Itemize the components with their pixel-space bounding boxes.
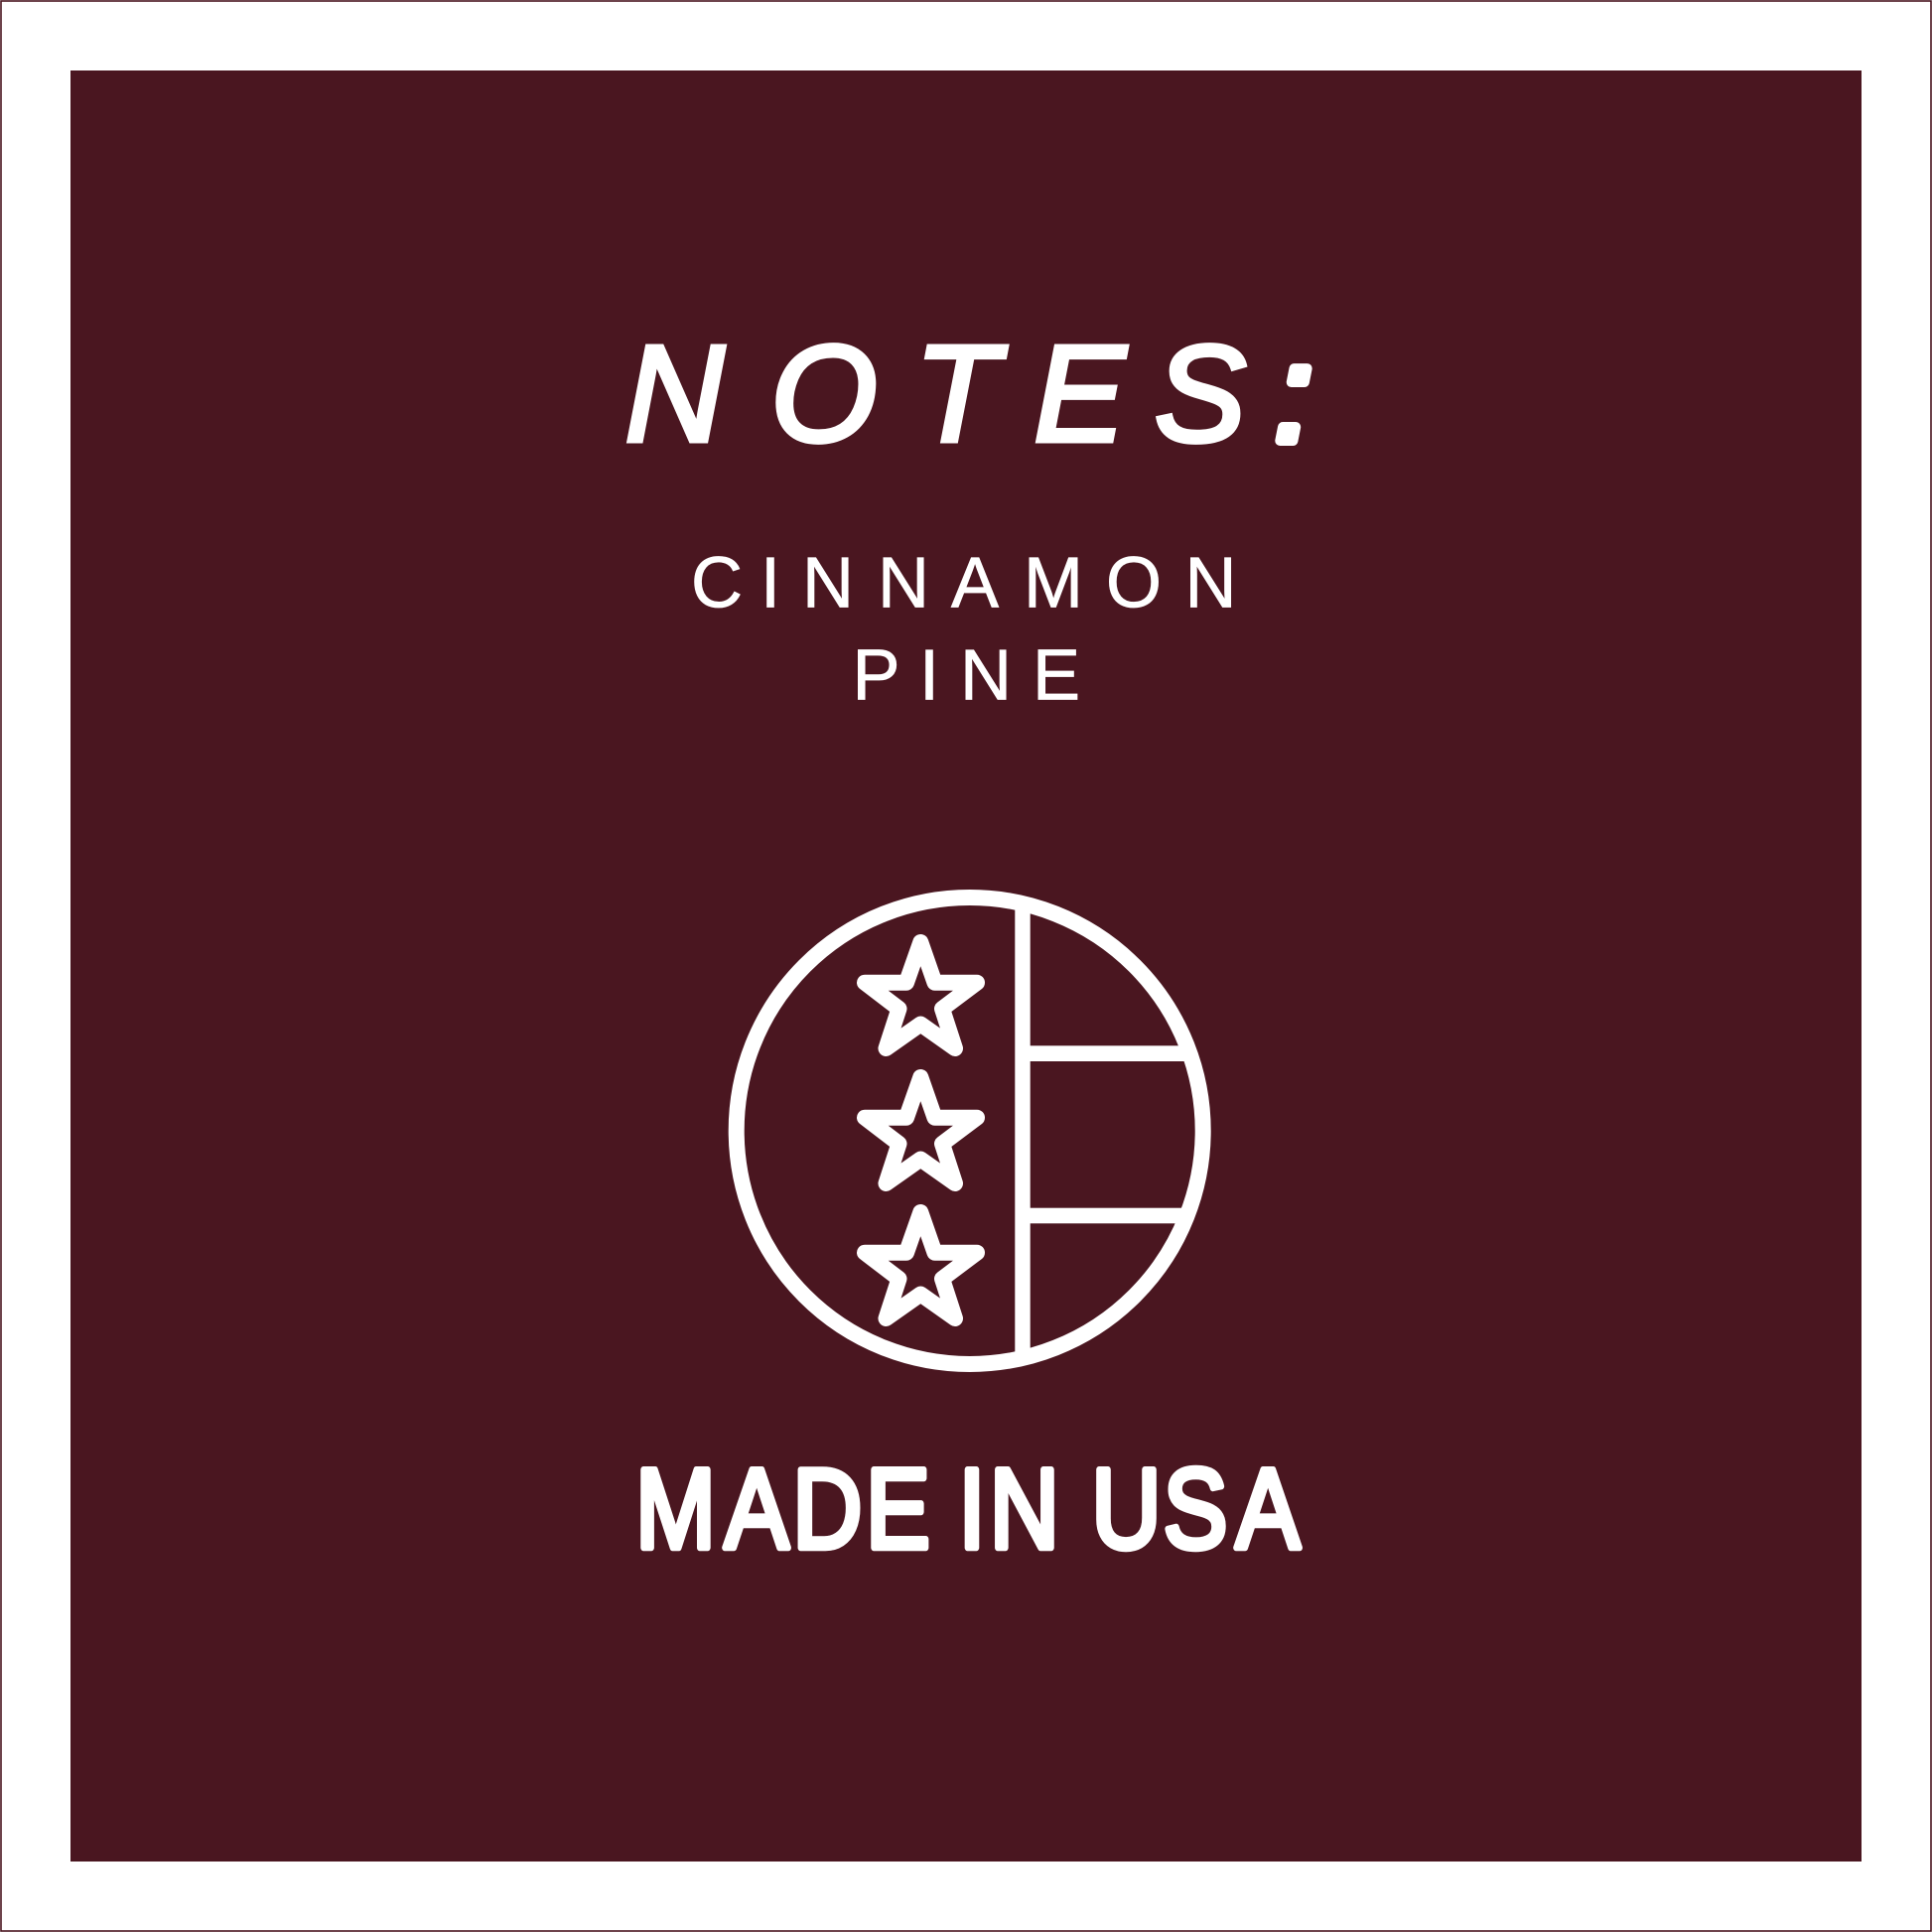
icon part: circle outline [737,897,1203,1364]
text: scent note cinnamon: CINNAMON [691,544,1237,623]
icon part: flag stripes [1015,901,1187,1360]
text: scent note pine: PINE [852,635,1080,715]
title: NOTES: NOTES: [625,318,1312,471]
icon: American flag circle [737,897,1203,1364]
icon part: three stars [865,942,977,1318]
text: made in USA: MADEINUSA [635,1447,1301,1573]
